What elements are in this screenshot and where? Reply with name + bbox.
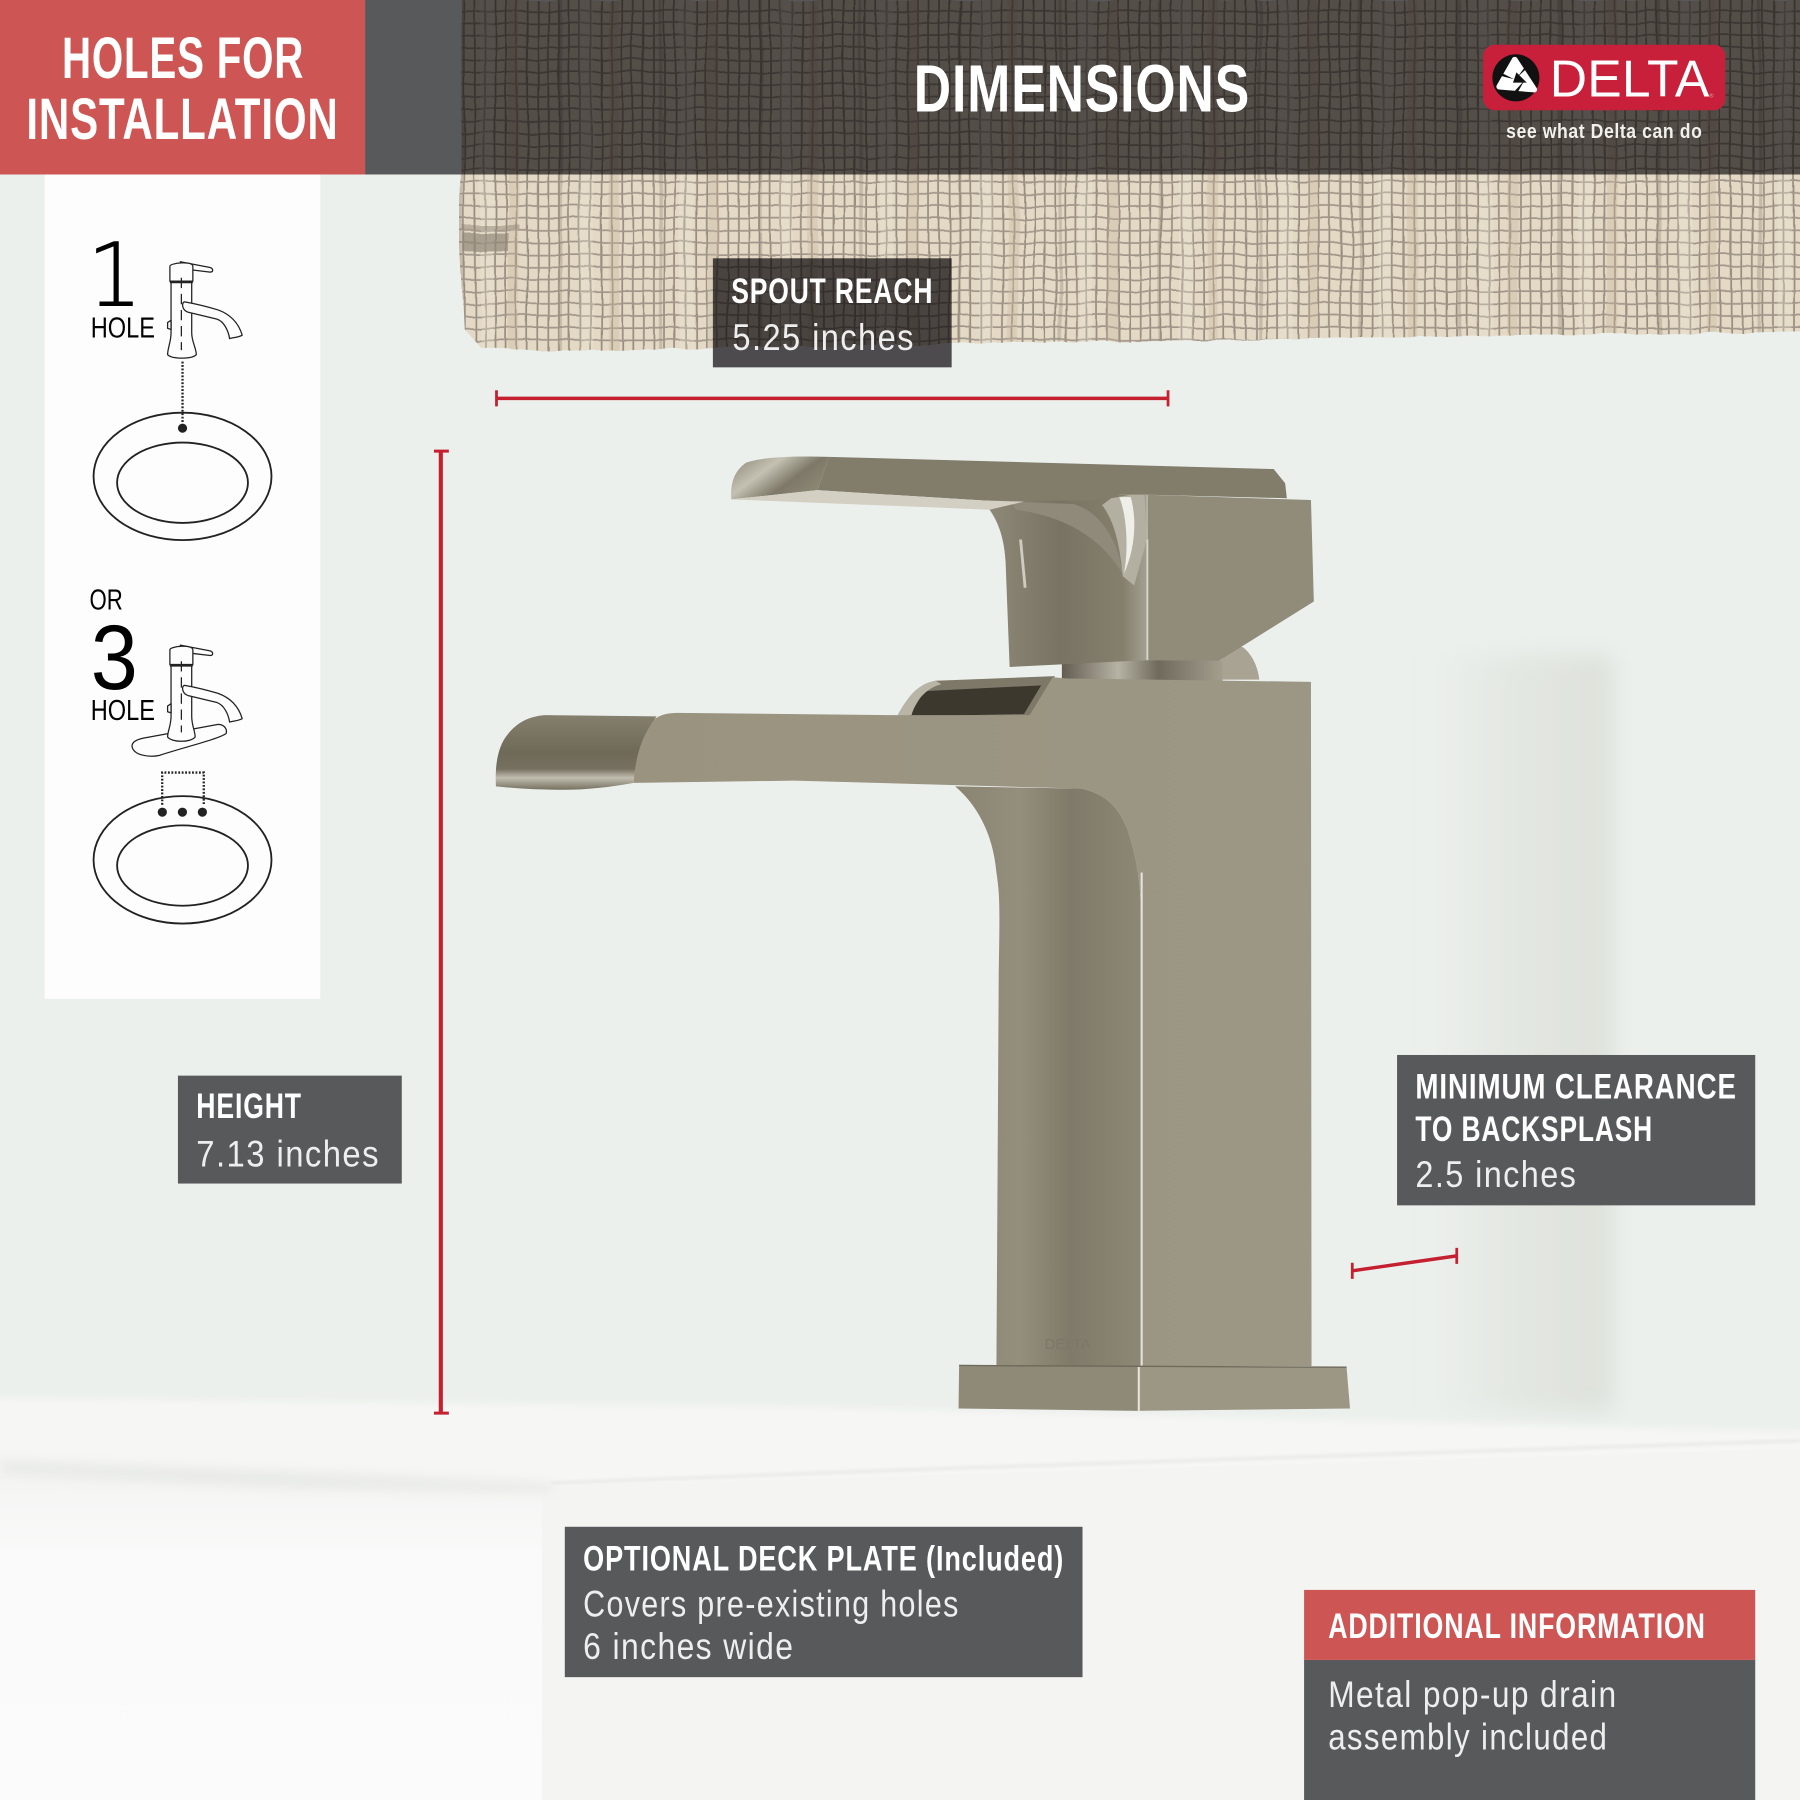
heading: HOLES FOR: HOLES FOR bbox=[62, 26, 304, 91]
header: gray band bbox=[365, 0, 461, 174]
callout line 1: Covers pre-existing holes bbox=[583, 1583, 960, 1624]
valve stem bbox=[1062, 660, 1223, 682]
heading: INSTALLATION: INSTALLATION bbox=[26, 87, 339, 152]
Delta logo bbox=[1483, 45, 1725, 143]
wall shadow band bbox=[1429, 654, 1613, 1412]
header title: DIMENSIONS: DIMENSIONS bbox=[914, 52, 1250, 126]
panel heading bar bbox=[1304, 1590, 1755, 1660]
label OR: OR bbox=[90, 585, 123, 617]
callout box bbox=[565, 1527, 1083, 1677]
column left face bbox=[955, 786, 1141, 1366]
handle neck bbox=[990, 495, 1147, 667]
handle lever top bbox=[817, 457, 1287, 501]
callout value: 7.13 inches bbox=[196, 1133, 380, 1174]
callout value: 2.5 inches bbox=[1415, 1154, 1577, 1195]
number 3: 3 bbox=[91, 607, 138, 709]
handle block bbox=[1147, 495, 1314, 661]
icon: single hole sink bbox=[94, 413, 271, 540]
callout box bbox=[178, 1076, 402, 1184]
header: fabric tint band bbox=[461, 0, 1800, 174]
panel: holes for installation bbox=[0, 0, 365, 999]
dimension line: clearance bbox=[1352, 1248, 1457, 1279]
callout: height bbox=[178, 1076, 402, 1184]
panel: additional information bbox=[1304, 1590, 1755, 1800]
woven fabric towel bbox=[459, 0, 1800, 351]
icon: three hole sink bbox=[94, 773, 271, 924]
neck side highlight bbox=[1021, 540, 1025, 588]
column corner highlight bbox=[1141, 872, 1143, 1366]
spout and column right face bbox=[634, 677, 1312, 1366]
callout box bbox=[713, 258, 952, 367]
callout box bbox=[1397, 1055, 1755, 1205]
handle edge highlight bbox=[1146, 540, 1148, 660]
icon: three hole faucet with deck plate bbox=[132, 645, 242, 756]
logo wordmark: DELTA bbox=[1550, 49, 1710, 107]
callout: minimum clearance bbox=[1397, 1055, 1755, 1205]
panel line 2: assembly included bbox=[1328, 1716, 1608, 1757]
callout heading: HEIGHT bbox=[196, 1086, 302, 1126]
logo mark bbox=[1492, 54, 1539, 101]
logo badge bbox=[1483, 45, 1725, 110]
faucet photo bbox=[496, 456, 1350, 1411]
icon: single hole faucet bbox=[168, 262, 242, 422]
callout: spout reach bbox=[713, 258, 952, 367]
lever chrome tip bbox=[731, 456, 829, 499]
registered mark: ® bbox=[1709, 93, 1714, 100]
spout tip bbox=[496, 715, 657, 790]
handle streak highlight bbox=[1102, 495, 1147, 585]
countertop bbox=[0, 1398, 1800, 1800]
number 1: 1 bbox=[87, 224, 143, 326]
dimension line: height bbox=[434, 451, 449, 1413]
spout opening bbox=[898, 676, 1055, 716]
lever underside highlight bbox=[731, 490, 1024, 510]
callout line 2: 6 inches wide bbox=[583, 1626, 794, 1667]
dimension line: spout reach bbox=[496, 390, 1169, 406]
callout heading line 2: TO BACKSPLASH bbox=[1415, 1109, 1653, 1149]
white panel background bbox=[45, 174, 320, 999]
handle arm top curve bbox=[1010, 502, 1123, 574]
callout heading: OPTIONAL DECK PLATE (Included) bbox=[583, 1538, 1064, 1578]
base plate bbox=[959, 1336, 1350, 1411]
base plate: DELTA bbox=[1045, 1336, 1091, 1353]
callout value: 5.25 inches bbox=[732, 317, 915, 358]
panel line 1: Metal pop-up drain bbox=[1328, 1674, 1617, 1715]
valve dome bbox=[1217, 647, 1259, 680]
callout heading: SPOUT REACH bbox=[731, 271, 933, 311]
red heading block bbox=[0, 0, 365, 174]
callout: optional deck plate bbox=[565, 1527, 1083, 1677]
label HOLE second: HOLE bbox=[91, 695, 155, 727]
panel body bbox=[1304, 1660, 1755, 1800]
handle white streak bbox=[1119, 497, 1134, 574]
label HOLE: HOLE bbox=[91, 313, 155, 345]
tagline: see what Delta can do bbox=[1506, 120, 1702, 143]
